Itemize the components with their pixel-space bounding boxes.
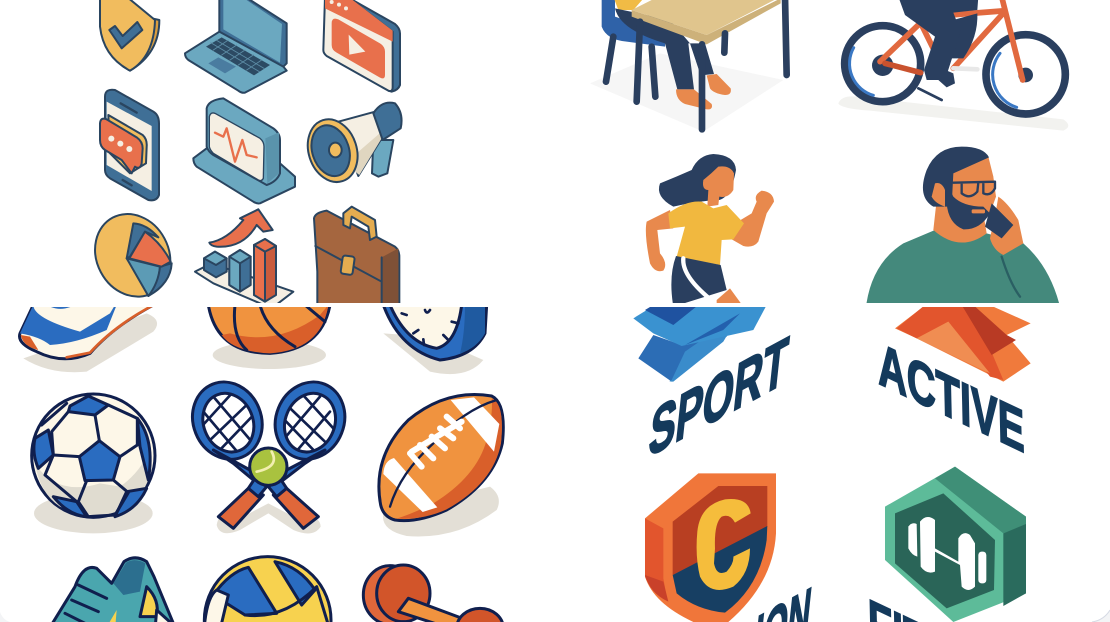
label: SPORT: SPORT xyxy=(646,323,791,473)
icon: dumbbell xyxy=(363,565,503,622)
icon: laptop xyxy=(185,0,287,93)
panel: colourful sports icons xyxy=(20,305,503,622)
icon: growth bar chart xyxy=(195,209,293,308)
logo: SPORT xyxy=(633,307,790,454)
illustration: man on phone xyxy=(866,147,1060,307)
icon: shield xyxy=(100,0,159,71)
icon: basketball xyxy=(208,305,330,369)
icon: monitor with pulse xyxy=(193,98,295,203)
label: ACTIVE: ACTIVE xyxy=(877,330,1025,467)
icon: phone with chat bubble xyxy=(100,90,159,200)
icon: briefcase xyxy=(314,207,399,317)
icon: american football xyxy=(379,395,503,536)
icon: crossed tennis rackets with ball xyxy=(181,371,356,533)
panel: flat people illustrations xyxy=(590,0,1068,307)
panel: sports logos xyxy=(633,305,1031,622)
icon: video window xyxy=(323,0,400,92)
logo: ACTIVE xyxy=(877,305,1031,467)
illustration: person at desk xyxy=(590,0,787,132)
illustration: woman running xyxy=(646,154,774,307)
logo: C shield xyxy=(645,473,815,622)
icon: megaphone xyxy=(300,103,402,189)
panel: isometric business icons xyxy=(81,0,402,317)
icon: stopwatch xyxy=(383,305,487,374)
icon: teal sneaker xyxy=(48,558,173,622)
logo: FIT hexagon xyxy=(867,467,1026,622)
illustration: cyclist on bicycle xyxy=(838,0,1068,131)
panel frame: rounded bottom corners xyxy=(0,610,1110,622)
icon: soccer ball xyxy=(32,394,155,533)
icon: running shoe xyxy=(20,305,157,372)
icon: volleyball xyxy=(204,557,331,622)
icon: pie chart xyxy=(94,213,173,298)
